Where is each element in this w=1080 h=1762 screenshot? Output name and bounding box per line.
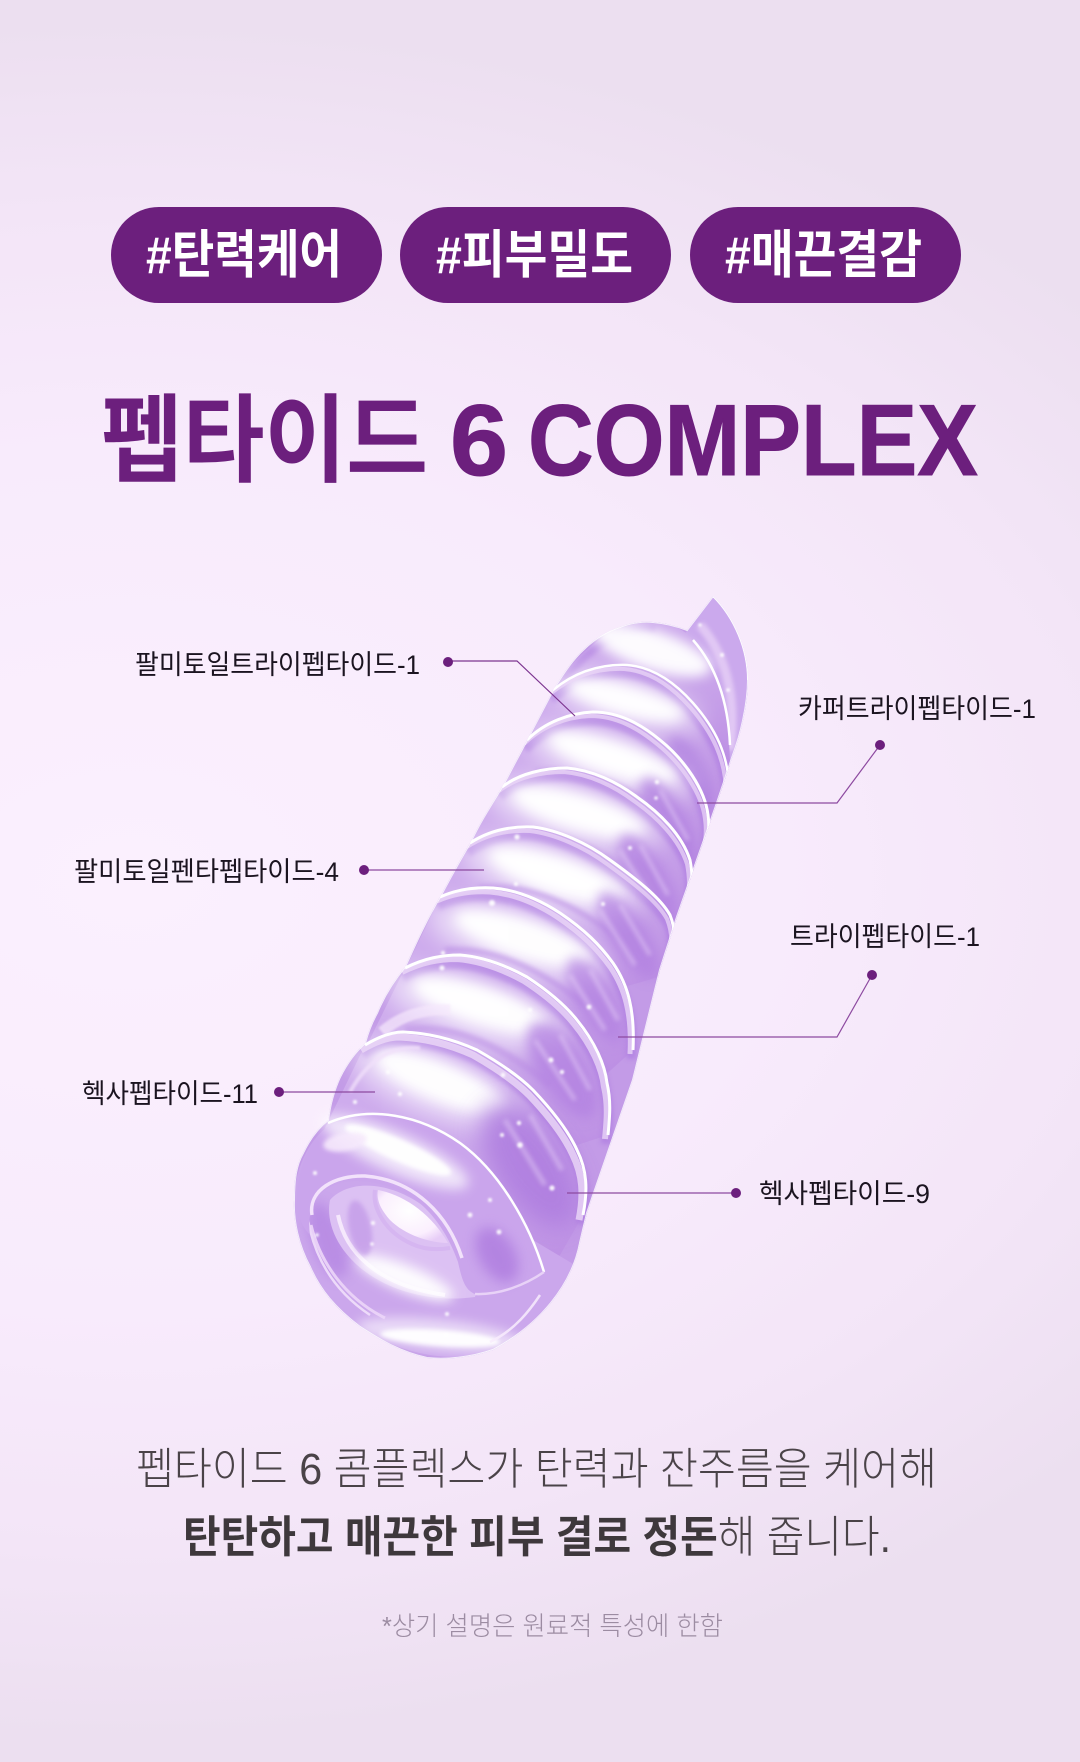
callout: 헥사펩타이드-9: 헥사펩타이드-9 — [759, 1179, 930, 1209]
sparkles — [313, 623, 730, 1337]
opening — [378, 1190, 448, 1243]
description: 탄탄하고 매끈한 피부 결로 정돈해 줍니다. — [183, 1513, 891, 1562]
callout: 헥사펩타이드-11 — [82, 1079, 375, 1109]
title: 펩타이드 — [101, 388, 428, 495]
callout: 트라이펩타이드-1: 트라이펩타이드-1 — [790, 922, 980, 952]
description: 펩타이드 6 콤플렉스가 탄력과 잔주름을 케어해 — [136, 1445, 937, 1494]
hashtag pills — [111, 207, 961, 303]
title — [101, 385, 978, 497]
outer rim: lower ring — [295, 1136, 574, 1357]
pill: 매끈결감: #매끈결감 — [725, 227, 922, 285]
coil C — [506, 710, 710, 880]
silhouette edge — [294, 596, 748, 1359]
title: COMPLEX — [528, 385, 978, 497]
interior of tube — [329, 1186, 476, 1310]
coil F — [400, 885, 635, 1080]
pill: 피부밀도 — [400, 207, 671, 303]
callout: 팔미토일펜타펩타이드-4 — [74, 857, 484, 887]
pill: 피부밀도: #피부밀도 — [436, 227, 633, 285]
description — [136, 1445, 937, 1562]
pill: 탄력케어: #탄력케어 — [146, 227, 342, 285]
callout: 카퍼트라이펩타이드-1: 카퍼트라이펩타이드-1 — [798, 694, 1036, 724]
callout: 팔미토일펜타펩타이드-4: 팔미토일펜타펩타이드-4 — [74, 857, 339, 887]
tube end: front lip — [297, 1101, 544, 1294]
coil D — [473, 766, 693, 926]
illustration: peptide spiral — [280, 590, 760, 1370]
footnote: *상기 설명은 원료적 특성에 한함 — [382, 1611, 723, 1641]
callout: 헥사펩타이드-9 — [567, 1179, 930, 1209]
coil E — [434, 825, 674, 986]
callout: 트라이펩타이드-1 — [618, 922, 980, 1037]
callout: 헥사펩타이드-11: 헥사펩타이드-11 — [82, 1079, 258, 1109]
callout: 팔미토일트라이펩타이드-1: 팔미토일트라이펩타이드-1 — [135, 650, 420, 680]
pill: 매끈결감 — [690, 207, 961, 303]
callout: 카퍼트라이펩타이드-1 — [697, 694, 1036, 803]
coil G — [370, 954, 614, 1145]
coil: tip — [686, 596, 748, 760]
coil A — [558, 622, 732, 768]
pill: 탄력케어 — [111, 207, 382, 303]
title: 6 — [450, 385, 508, 497]
coil H — [325, 1030, 591, 1256]
silhouette base — [280, 590, 760, 1370]
callout: 팔미토일트라이펩타이드-1 — [135, 650, 575, 716]
coil B — [536, 660, 728, 822]
